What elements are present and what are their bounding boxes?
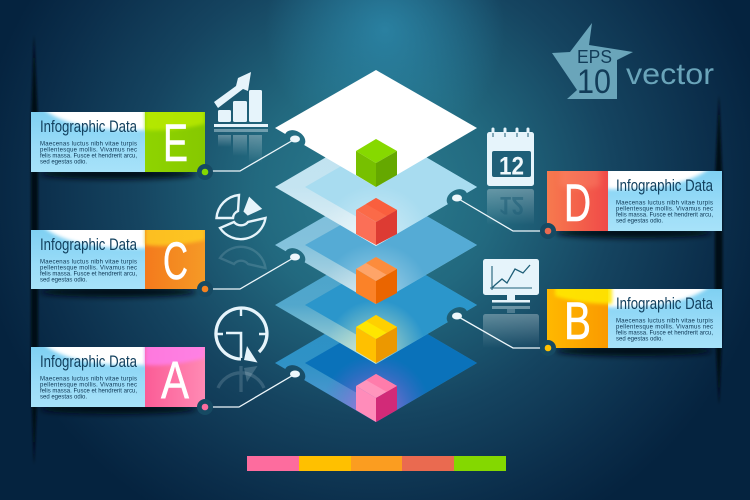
- side strip: left: [31, 35, 38, 465]
- cube: pink: [356, 374, 397, 422]
- body text: felis massa. Fusce et hendrerit arcu,: [616, 212, 713, 218]
- body text: pellentesque mollis. Vivamus nec: [40, 382, 137, 388]
- card B: [540, 285, 722, 356]
- side strip: right: [715, 95, 722, 405]
- connector: A: [205, 370, 300, 407]
- body text: [40, 260, 137, 284]
- cube: red: [356, 198, 397, 245]
- body text: Maecenas luctus nibh vitae turpis: [616, 200, 713, 206]
- heading: Infographic Data: [40, 236, 138, 254]
- heading: Infographic Data: [616, 177, 714, 195]
- body text: Maecenas luctus nibh vitae turpis: [40, 260, 137, 266]
- card E: [31, 108, 213, 180]
- body text: felis massa. Fusce et hendrerit arcu,: [40, 154, 137, 160]
- cube: yellow: [356, 315, 397, 363]
- card D: [540, 167, 722, 239]
- connector: E: [205, 136, 300, 171]
- body text: sed egestas odio.: [40, 160, 87, 166]
- body text: [40, 142, 137, 166]
- logo: EPS 10 vector: vector: [626, 58, 714, 91]
- icon: bar chart with arrow: [214, 72, 268, 163]
- icon: pie chart: [216, 195, 266, 268]
- logo: EPS 10 vector: EPS: [577, 47, 612, 67]
- letter: D: [564, 174, 591, 233]
- logo: EPS 10 vector: [552, 23, 714, 101]
- body text: [616, 200, 713, 224]
- card A: [31, 343, 213, 415]
- icon: monitor with line chart: [483, 259, 539, 348]
- body text: felis massa. Fusce et hendrerit arcu,: [40, 388, 137, 394]
- colour legend bar: [247, 456, 506, 471]
- body text: sed egestas odio.: [616, 336, 663, 342]
- body text: felis massa. Fusce et hendrerit arcu,: [40, 272, 137, 278]
- body text: Maecenas luctus nibh vitae turpis: [616, 318, 713, 324]
- card C: [31, 226, 213, 297]
- heading: Infographic Data: [40, 353, 138, 371]
- layer 4 (yellow cube): [275, 275, 477, 364]
- body text: sed egestas odio.: [616, 218, 663, 224]
- letter: E: [163, 114, 188, 173]
- icon: calendar: 12: [499, 152, 524, 180]
- body text: Maecenas luctus nibh vitae turpis: [40, 142, 137, 148]
- body text: pellentesque mollis. Vivamus nec: [616, 324, 713, 330]
- icon: calendar: 12: [499, 191, 524, 219]
- body text: Maecenas luctus nibh vitae turpis: [40, 376, 137, 382]
- connector: D: [452, 194, 548, 231]
- layer 1 (white, green cube): [275, 70, 477, 187]
- logo: EPS 10 vector: 10: [577, 63, 611, 101]
- icon: calendar: [487, 129, 534, 225]
- body text: pellentesque mollis. Vivamus nec: [616, 206, 713, 212]
- body text: [40, 376, 137, 400]
- connector: C: [205, 254, 300, 289]
- body text: pellentesque mollis. Vivamus nec: [40, 266, 137, 272]
- cube: orange: [356, 257, 397, 304]
- letter: C: [163, 232, 188, 291]
- layer 5 (blue, pink cube): [275, 334, 477, 422]
- heading: Infographic Data: [40, 118, 138, 136]
- letter: A: [161, 351, 190, 410]
- icon: clock: [216, 308, 267, 392]
- heading: Infographic Data: [616, 295, 714, 313]
- layer 2 (red cube): [275, 158, 477, 246]
- body text: sed egestas odio.: [40, 394, 87, 400]
- body text: felis massa. Fusce et hendrerit arcu,: [616, 330, 713, 336]
- cube: green: [356, 139, 397, 187]
- connector: B: [452, 312, 548, 348]
- body text: sed egestas odio.: [40, 278, 87, 284]
- layer 3 (orange cube): [275, 216, 477, 304]
- letter: B: [564, 292, 591, 351]
- body text: pellentesque mollis. Vivamus nec: [40, 148, 137, 154]
- body text: [616, 318, 713, 342]
